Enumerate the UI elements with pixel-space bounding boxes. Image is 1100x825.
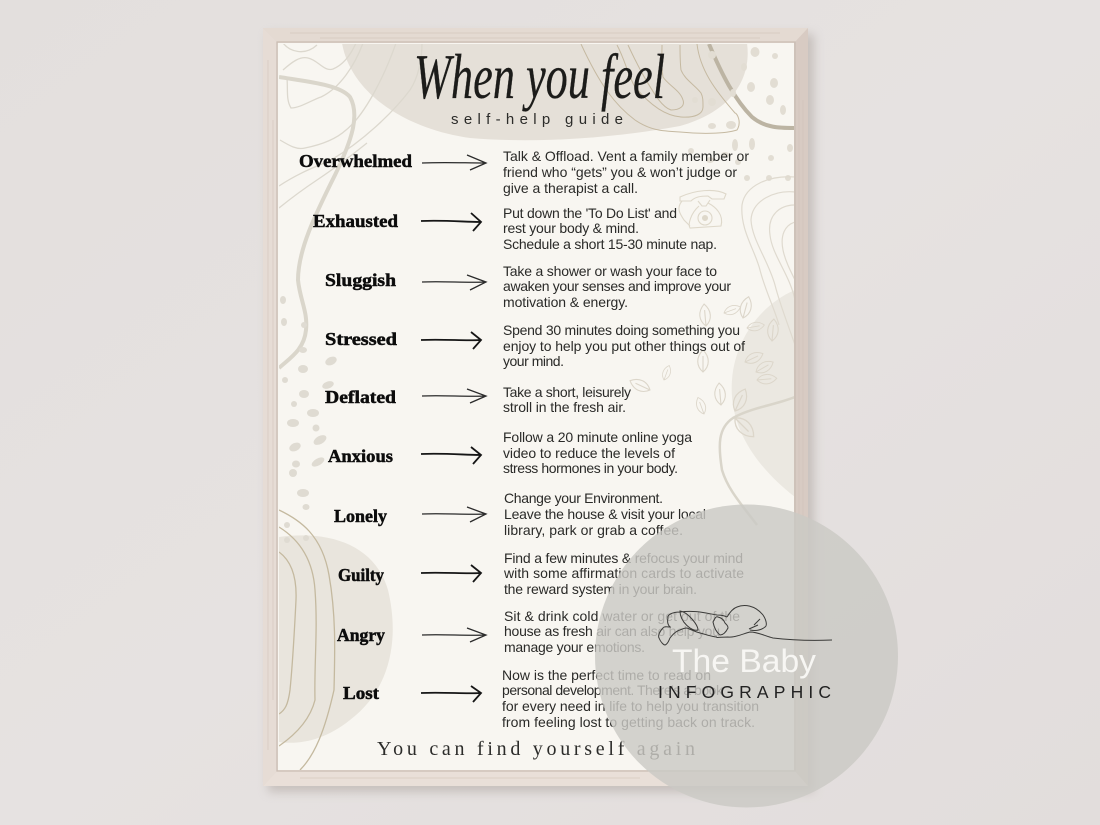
row: Lonely: library, park or grab a coffee. [504,522,683,538]
closing line: You can find yourself again [377,738,695,760]
row: Overwhelmed: Talk & Offload. Vent a family member or [503,148,749,164]
subtitle: self-help guide [451,111,623,128]
left dots [280,296,338,543]
top-right dots [688,47,793,181]
row: Stressed: Spend 30 minutes doing something you [503,322,740,338]
row: Anxious [328,429,692,476]
row: Angry: house as fresh air can also help you [504,623,720,639]
row: Overwhelmed: give a therapist a call. [503,180,638,196]
row: Sluggish: Sluggish [325,270,396,290]
row: Guilty: the reward system in your brain. [504,581,697,597]
row: Guilty [338,550,744,597]
row: Lost: Lost [343,683,379,703]
row: Deflated: Take a short, leisurely [503,384,631,400]
row: Sluggish: motivation & energy. [503,294,628,310]
top-right thick stroke [709,44,795,128]
arrow [422,507,486,522]
row: Anxious: Follow a 20 minute online yoga [503,429,692,445]
row: Exhausted: Put down the 'To Do List' and [503,205,677,221]
icon: telephone [679,190,726,228]
bottom-left beige blob [279,535,393,743]
arrow [421,565,481,582]
leaves on branch [628,295,779,441]
row: Anxious: stress hormones in your body. [503,460,678,476]
arrow [421,447,481,464]
row: Anxious: Anxious [328,446,393,466]
row: Lost: personal development. There's a book [502,682,724,698]
row: Stressed [325,322,745,369]
row: Guilty: with some affirmation cards to activate [503,565,744,581]
row: Sluggish: Take a shower or wash your face to [503,263,717,279]
row: Sluggish: awaken your senses and improve your [503,278,731,294]
row: Exhausted: Schedule a short 15-30 minute nap. [503,236,717,252]
arrow [422,628,486,642]
left thin contour lines [279,43,422,208]
row: Angry: Sit & drink cold water or get out of the [504,608,740,624]
row: Lonely [334,490,706,538]
row: Lonely: Lonely [334,506,387,526]
arrow [422,155,486,170]
row: Stressed: Stressed [325,329,397,349]
row: Stressed: your mind. [503,353,564,369]
row: Angry [337,608,740,655]
row: Exhausted [313,205,717,252]
wooden frame [263,28,808,786]
abstract background artwork [279,43,795,770]
right contour lines [742,177,795,345]
row: Anxious: video to reduce the levels of [503,445,675,461]
poster paper [278,43,794,770]
arrow [422,389,486,403]
row: Guilty: Guilty [338,565,384,585]
row: Lonely: Leave the house & visit your local [504,506,706,522]
row: Lost: for every need in life to help you transition [502,698,759,714]
row: Sluggish [325,263,731,310]
row: Lost: Now is the perfect time to read on [502,667,711,683]
bottom-left gold contours [279,510,335,770]
row: Lost [343,667,759,730]
row: Angry: manage your emotions. [504,639,645,655]
row: Stressed: enjoy to help you put other things out of [503,338,745,354]
arrow [421,213,481,231]
branch stroke [718,396,794,505]
row: Deflated: Deflated [325,387,396,407]
top beige blob [342,43,748,140]
frame shadow [268,34,814,792]
row: Overwhelmed: Overwhelmed [299,151,412,171]
title: When you feel [414,41,665,112]
row: Exhausted: Exhausted [313,211,398,231]
row: Overwhelmed: friend who “gets” you & won’t judge or [503,164,737,180]
row: Overwhelmed [299,148,749,196]
row: Angry: Angry [337,625,385,645]
framed poster scene [263,28,898,808]
row: Lonely: Change your Environment. [504,490,663,506]
watermark text: The Baby: The Baby [672,643,816,679]
top-right gold contours [581,44,739,133]
arrow [421,686,481,702]
arrow [421,332,481,349]
watermark text: INFOGRAPHIC: INFOGRAPHIC [658,682,831,702]
arrow [422,275,486,290]
row: Guilty: Find a few minutes & refocus your mind [504,550,743,566]
watermark circle [595,504,898,808]
row: Exhausted: rest your body & mind. [503,220,639,236]
row: Lost: from feeling lost to getting back on track. [502,714,755,730]
icon: sleeping baby line drawing [659,606,832,645]
row: Deflated: stroll in the fresh air. [503,399,626,415]
left thick stroke [279,77,354,368]
right beige blob [732,290,795,497]
row: Deflated [325,384,631,415]
